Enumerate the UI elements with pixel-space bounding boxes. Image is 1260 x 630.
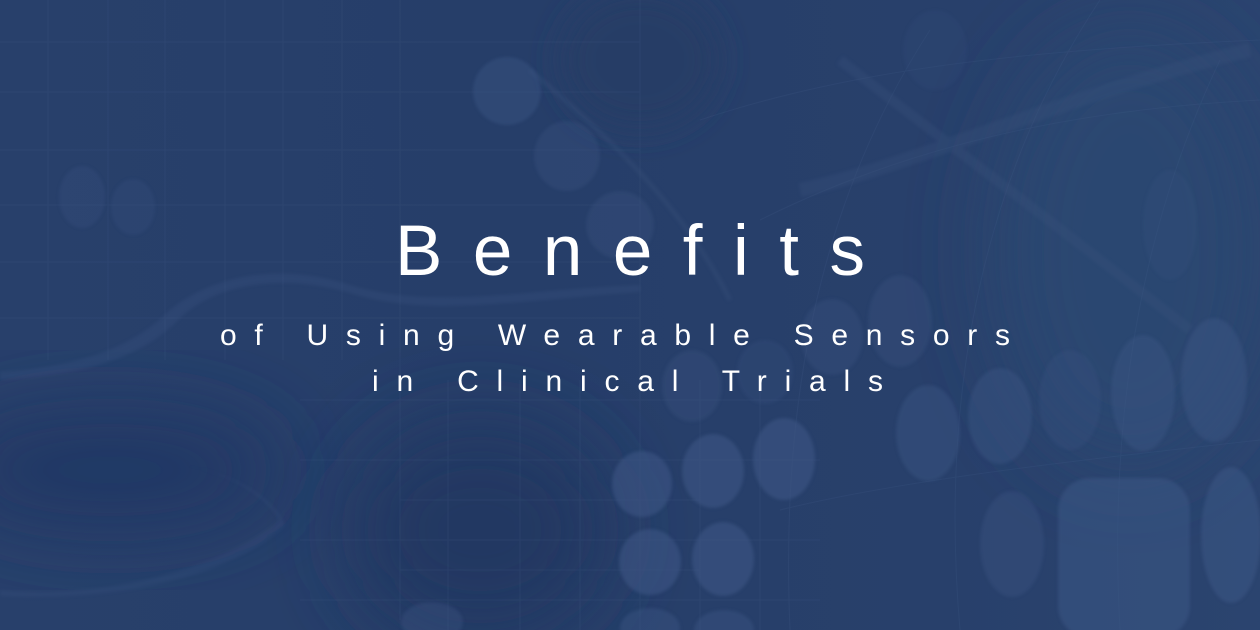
title: Benefits — [395, 212, 865, 291]
DNA helix strands — [530, 50, 1250, 330]
subtitle line 2: in Clinical Trials — [372, 365, 883, 398]
subtitle line 1: of Using Wearable Sensors — [220, 319, 1010, 352]
subtitle — [220, 319, 1010, 398]
